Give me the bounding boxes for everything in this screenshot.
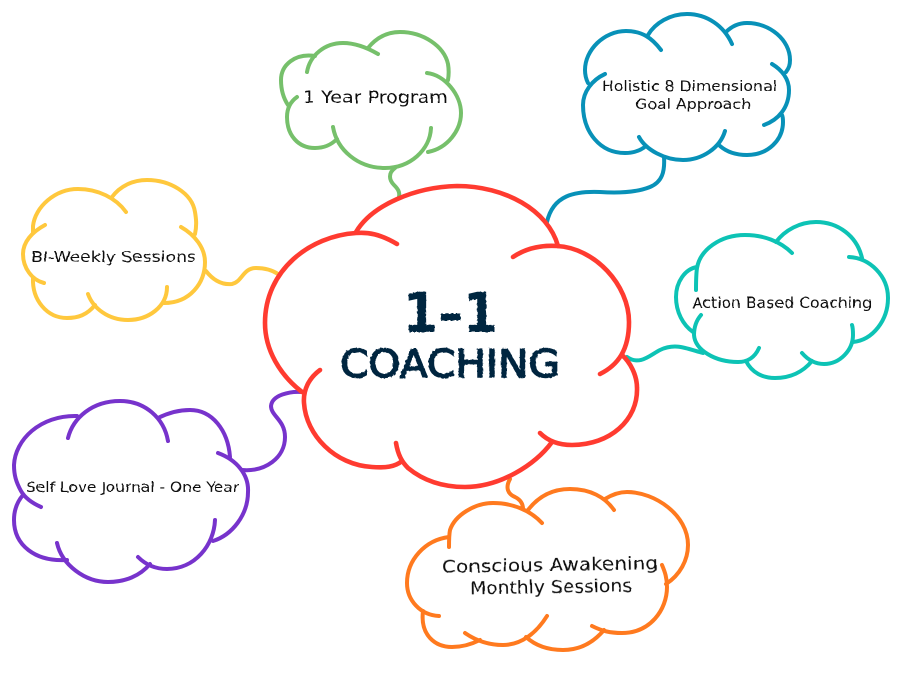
label: 1 Year Program xyxy=(303,88,448,108)
yellow cloud outline xyxy=(23,180,205,320)
connector: green xyxy=(390,168,399,197)
connector: blue xyxy=(547,157,664,222)
label: BI-Weekly Sessions xyxy=(31,248,196,266)
cloud: BI-Weekly Sessions xyxy=(23,180,205,320)
title: COACHING: COACHING xyxy=(340,342,560,386)
green cloud outline xyxy=(281,32,461,168)
teal cloud outline xyxy=(676,222,888,378)
cloud: 1 Year Program xyxy=(281,32,461,168)
label line 2: Monthly Sessions xyxy=(470,576,632,599)
label: Self Love Journal - One Year xyxy=(26,480,239,496)
connector: purple xyxy=(242,392,302,470)
label line 2: Goal Approach xyxy=(635,97,751,113)
red cloud outline xyxy=(265,186,637,487)
label: Conscious Awakening xyxy=(442,553,658,578)
label: Action Based Coaching xyxy=(692,294,872,312)
title: 1-1: 1–1 xyxy=(403,281,498,345)
cloud: Action Based Coaching xyxy=(676,222,888,378)
connector: orange xyxy=(508,479,523,509)
orange cloud outline xyxy=(407,489,688,650)
blue cloud outline xyxy=(583,14,790,160)
label: Holistic 8 Dimensional xyxy=(602,79,777,95)
cloud: Conscious Awakening Monthly Sessions xyxy=(407,489,688,650)
connector: teal xyxy=(627,347,703,360)
connector: yellow xyxy=(206,268,278,284)
central cloud: 1-1 Coaching xyxy=(265,186,637,487)
cloud: Self Love Journal - One Year xyxy=(14,401,248,582)
purple cloud outline xyxy=(14,401,248,582)
cloud: Holistic 8 Dimensional Goal Approach xyxy=(583,14,790,160)
